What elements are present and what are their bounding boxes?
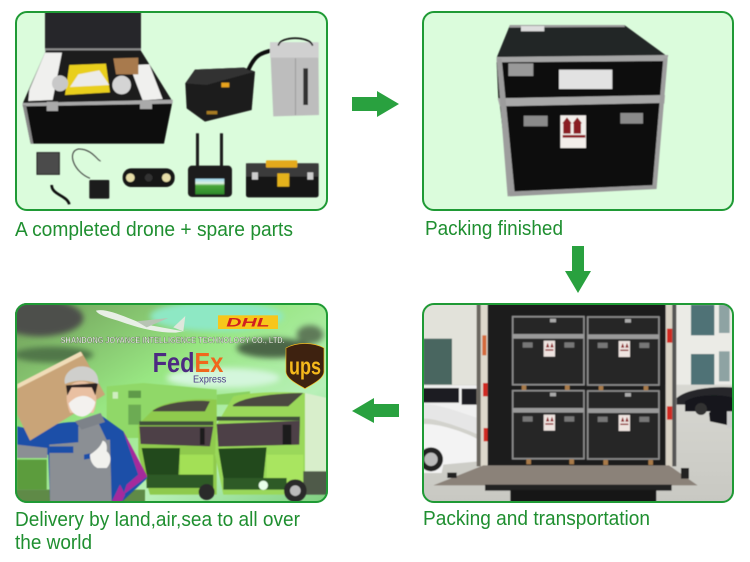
icon: battery charger — [185, 50, 273, 122]
logo: FedEx Express — [154, 352, 226, 384]
icon: airplane — [96, 310, 190, 333]
logo: UPS shield — [286, 343, 324, 389]
caption: packing and transportation: Packing and transportation — [423, 508, 650, 530]
road — [15, 490, 145, 505]
arrow: right — [352, 91, 399, 117]
icon: camera module — [123, 168, 175, 187]
photo: crates loaded in truck — [415, 298, 738, 505]
photo: drone case and accessories — [23, 11, 319, 204]
truck: right — [215, 392, 327, 502]
caption: completed drone: A completed drone + spare parts — [15, 219, 293, 241]
icon: remote controller — [188, 133, 232, 197]
panel: packing and transportation — [415, 298, 738, 505]
arrow: down — [565, 246, 591, 293]
icon: grey battery — [270, 38, 319, 116]
arrow: left — [352, 398, 399, 423]
panel: packing finished — [422, 11, 734, 211]
caption: packing finished: Packing finished — [425, 218, 563, 240]
icon: open flight case — [23, 11, 173, 144]
shipping containers — [17, 383, 327, 490]
panel: completed drone and spare parts — [15, 11, 328, 211]
worker with parcel — [17, 351, 147, 502]
logo: UPS shield: ups — [289, 354, 321, 381]
storm clouds — [0, 300, 323, 388]
icon: toolbox — [246, 160, 319, 197]
logo: DHL — [218, 315, 278, 329]
panel: delivery — [0, 300, 328, 505]
truck: left — [138, 399, 217, 500]
company name: SHANDONG JOYANCE INTELLIGENCE TECHNOLOGY CO., LTD. — [61, 335, 285, 345]
caption: delivery by land, air, sea: the world — [15, 532, 92, 554]
illustration: delivery scene — [0, 300, 327, 505]
caption: delivery by land, air, sea: Delivery by land,air,sea to all over — [15, 509, 300, 531]
logo: DHL: DHL — [226, 315, 270, 329]
photo: closed flight case — [497, 25, 668, 196]
logo: FedEx Express: FedEx — [153, 347, 224, 378]
logo: FedEx Express: Express — [193, 375, 226, 386]
icon: power pad and cable — [37, 149, 109, 204]
